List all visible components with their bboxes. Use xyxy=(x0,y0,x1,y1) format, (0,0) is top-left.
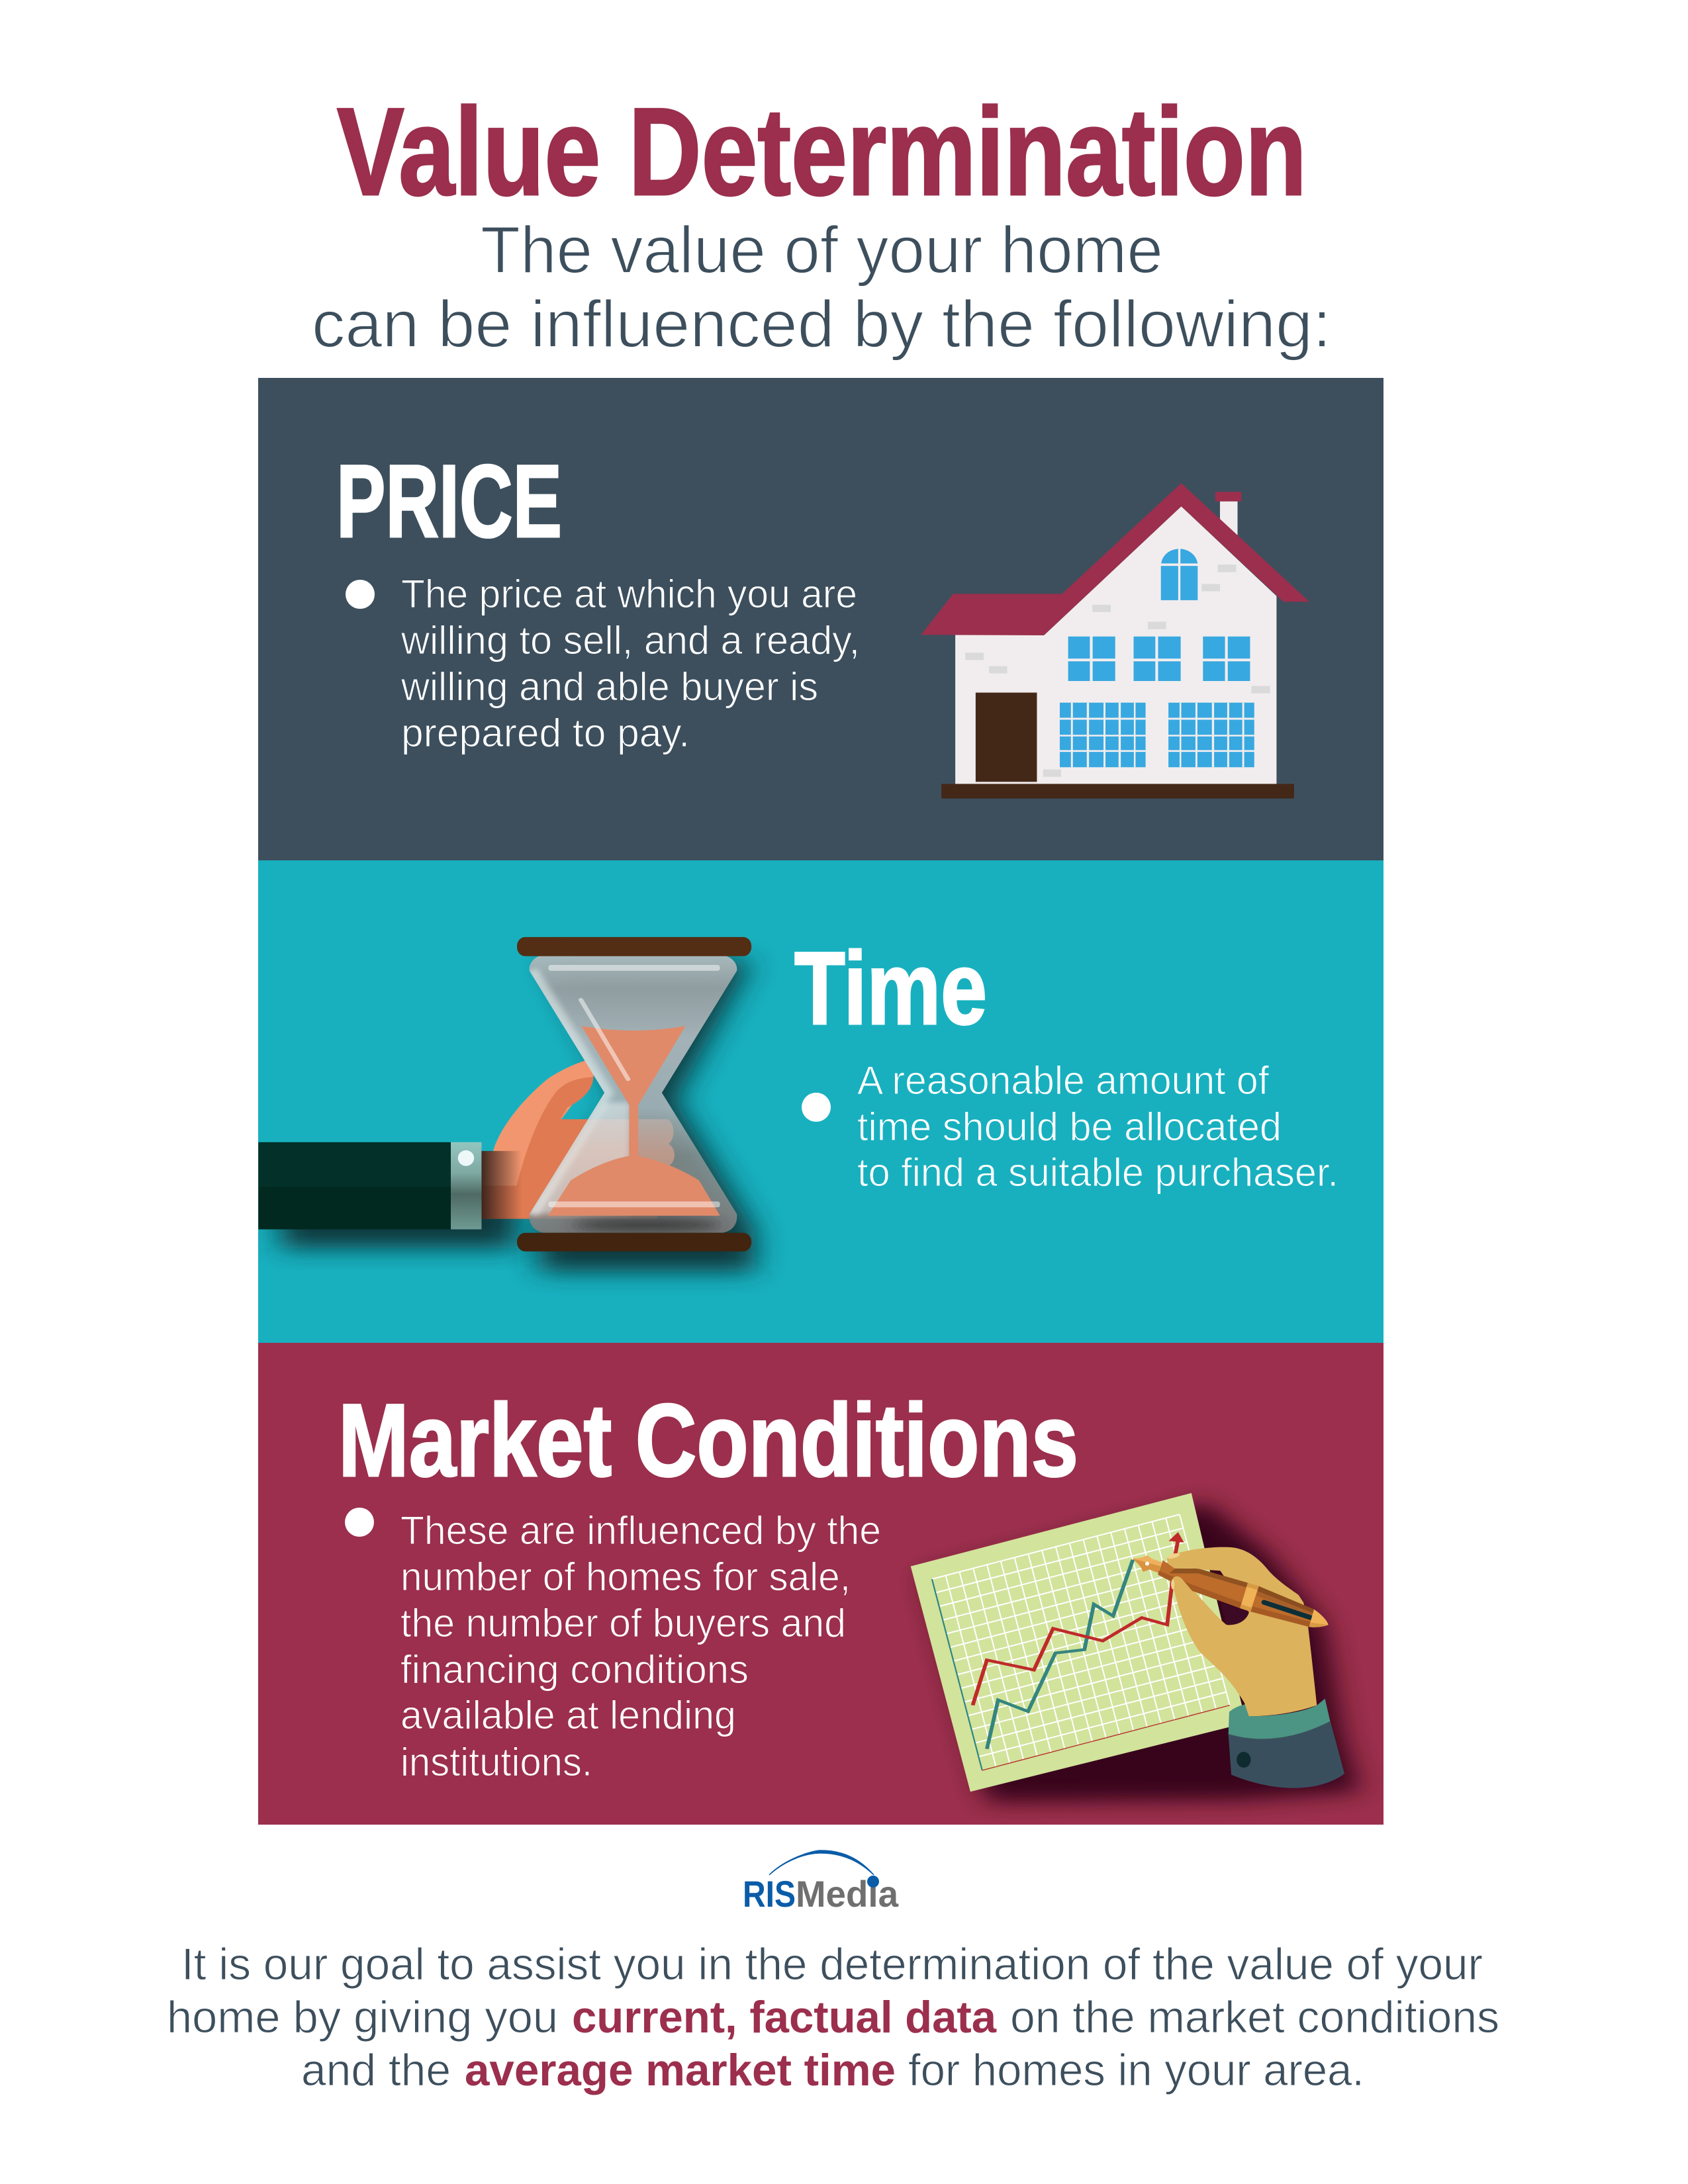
shirt cuff xyxy=(1229,1699,1344,1788)
panel: price xyxy=(258,378,1383,860)
subtitle: can be influenced by the following: xyxy=(312,287,1331,361)
market conditions text xyxy=(400,1508,881,1784)
thumb and fingertip xyxy=(1166,1551,1220,1595)
heading: market conditions: Market Conditions xyxy=(338,1383,1078,1498)
pen barrel xyxy=(1158,1560,1329,1627)
hand xyxy=(1167,1547,1317,1716)
time text: A reasonable amount of xyxy=(857,1058,1269,1103)
icon: chart with hand and pen xyxy=(911,1493,1360,1802)
hourglass glass xyxy=(530,955,737,1233)
market conditions text: institutions. xyxy=(400,1740,592,1784)
hand and pen xyxy=(1133,1547,1329,1716)
heading: price: PRICE xyxy=(336,444,562,559)
sleeve shadow xyxy=(280,1193,517,1248)
footer text: on the market conditions xyxy=(1010,1992,1499,2042)
market conditions text: financing conditions xyxy=(400,1647,749,1692)
time text: to find a suitable purchaser. xyxy=(857,1150,1338,1195)
teal line xyxy=(987,1560,1133,1749)
price text: willing to sell, and a ready, xyxy=(400,618,860,662)
graph paper xyxy=(911,1493,1246,1792)
cuff button xyxy=(458,1150,474,1166)
market conditions text: number of homes for sale, xyxy=(400,1555,851,1599)
logo: RISMedia: Media xyxy=(796,1873,899,1915)
footer text: home by giving you xyxy=(167,1992,558,2042)
icon: hand holding hourglass xyxy=(258,937,755,1271)
hourglass shadow xyxy=(539,960,755,1271)
shirt sleeve xyxy=(258,1142,451,1186)
footer text: and the xyxy=(301,2045,451,2095)
sleeve cuff xyxy=(451,1142,481,1230)
market conditions text: available at lending xyxy=(400,1693,736,1737)
bullet xyxy=(802,1093,831,1122)
market conditions text: the number of buyers and xyxy=(400,1601,846,1645)
subtitle xyxy=(312,213,1331,361)
panel: time xyxy=(258,860,1383,1343)
price text: willing and able buyer is xyxy=(400,664,818,709)
logo: RISMedia xyxy=(743,1850,899,1915)
subtitle: The value of your home xyxy=(481,213,1163,287)
price text xyxy=(400,572,860,755)
logo: RISMedia: RIS xyxy=(743,1873,796,1915)
price text: The price at which you are xyxy=(401,572,857,616)
footer text: It is our goal to assist you in the determination of the value of your xyxy=(181,1939,1483,1989)
red line with arrow xyxy=(972,1532,1184,1706)
footer text xyxy=(167,1939,1499,2095)
axes xyxy=(932,1579,982,1770)
panel: market conditions xyxy=(258,1343,1383,1825)
bullet xyxy=(346,580,375,609)
time text xyxy=(857,1058,1338,1195)
heading: time: Time xyxy=(794,931,987,1046)
hand xyxy=(481,1060,675,1219)
bullet xyxy=(345,1508,374,1537)
time text: time should be allocated xyxy=(857,1105,1282,1149)
pen nib xyxy=(1133,1555,1162,1573)
title: Value Determination xyxy=(337,82,1307,221)
icon: house xyxy=(921,483,1309,799)
price text: prepared to pay. xyxy=(401,711,690,755)
grid lines xyxy=(932,1514,1230,1770)
glass highlights xyxy=(548,965,720,1207)
footer text: for homes in your area. xyxy=(908,2045,1364,2095)
paper and hand shadow xyxy=(925,1502,1360,1802)
hourglass boards xyxy=(517,937,751,956)
gap between thumb and finger xyxy=(1221,1603,1249,1625)
footer text: current, factual data xyxy=(572,1992,997,2042)
sand xyxy=(581,1026,686,1159)
footer text: average market time xyxy=(465,2045,896,2095)
market conditions text: These are influenced by the xyxy=(400,1508,881,1553)
